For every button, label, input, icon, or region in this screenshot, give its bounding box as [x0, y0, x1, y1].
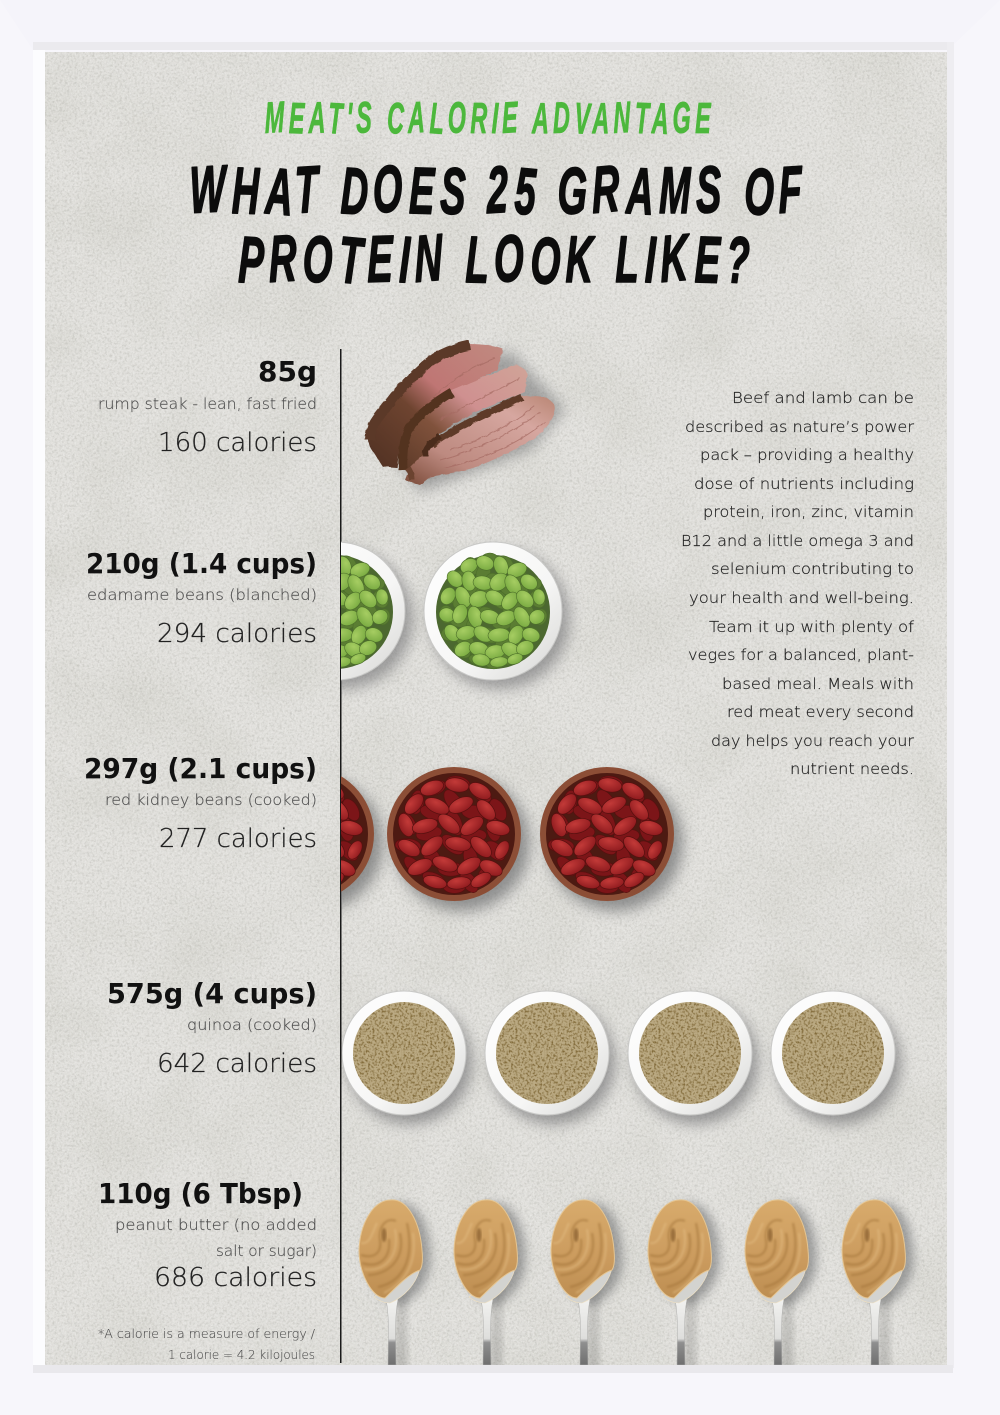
image: quinoa bowls	[342, 991, 901, 1124]
row: peanut butter label: 686 calories	[154, 1263, 317, 1293]
title: WHAT DOES 25 GRAMS OF	[188, 151, 808, 229]
row: edamame label: edamame beans (blanched)	[87, 586, 317, 604]
row: peanut butter label: salt or sugar)	[216, 1242, 317, 1260]
text block: description	[681, 389, 915, 778]
row: peanut butter label: 110g (6 Tbsp)	[98, 1177, 303, 1210]
footnote: 1 calorie = 4.2 kilojoules	[168, 1347, 315, 1362]
text block: description: Beef and lamb can be	[732, 389, 914, 407]
text block: description: protein, iron, zinc, vitamin	[703, 503, 914, 521]
title	[188, 151, 808, 298]
row: rump steak label: 85g	[258, 355, 317, 388]
text block: description: based meal. Meals with	[722, 675, 914, 693]
row: edamame label	[86, 547, 317, 649]
footnote: *A calorie is a measure of energy /	[98, 1326, 316, 1341]
row: rump steak label	[98, 355, 317, 458]
subtitle: meat's calorie advantage: MEAT'S CALORIE ADVANTAGE	[264, 93, 715, 144]
text block: description: pack – providing a healthy	[700, 446, 914, 464]
row: rump steak label: 160 calories	[158, 428, 317, 458]
row: quinoa label	[107, 977, 317, 1079]
row: rump steak label: rump steak - lean, fast fried	[98, 395, 317, 413]
text block: description: B12 and a little omega 3 and	[681, 532, 914, 550]
row: peanut butter label	[98, 1177, 317, 1293]
text block: description: day helps you reach your	[711, 732, 915, 750]
row: quinoa label: 642 calories	[157, 1049, 317, 1079]
row: kidney beans label	[84, 752, 317, 854]
image: peanut butter spoons	[359, 1200, 914, 1375]
text block: description: dose of nutrients including	[694, 475, 914, 493]
text block: description: veges for a balanced, plant-	[688, 646, 914, 664]
text block: description: described as nature’s power	[685, 418, 915, 436]
row: edamame label: 294 calories	[157, 619, 317, 649]
row: quinoa label: 575g (4 cups)	[107, 977, 317, 1010]
text block: description: nutrient needs.	[790, 760, 914, 778]
row: kidney beans label: 297g (2.1 cups)	[84, 752, 317, 785]
row: quinoa label: quinoa (cooked)	[187, 1016, 317, 1034]
row: kidney beans label: 277 calories	[159, 824, 317, 854]
text block: description: red meat every second	[727, 703, 914, 721]
text block: description: your health and well-being.	[689, 589, 914, 607]
title: PROTEIN LOOK LIKE?	[238, 220, 757, 298]
image: edamame bowls	[341, 542, 578, 696]
row: kidney beans label: red kidney beans (cooked)	[105, 791, 317, 809]
text block: description: selenium contributing to	[711, 560, 914, 578]
row: peanut butter label: peanut butter (no added	[115, 1216, 317, 1234]
image: rump steak slices	[368, 344, 565, 492]
row: edamame label: 210g (1.4 cups)	[86, 547, 317, 580]
footnote	[98, 1326, 316, 1362]
text block: description: Team it up with plenty of	[709, 618, 915, 636]
vertical divider	[340, 349, 342, 1363]
image: kidney bean bowls	[341, 766, 692, 920]
